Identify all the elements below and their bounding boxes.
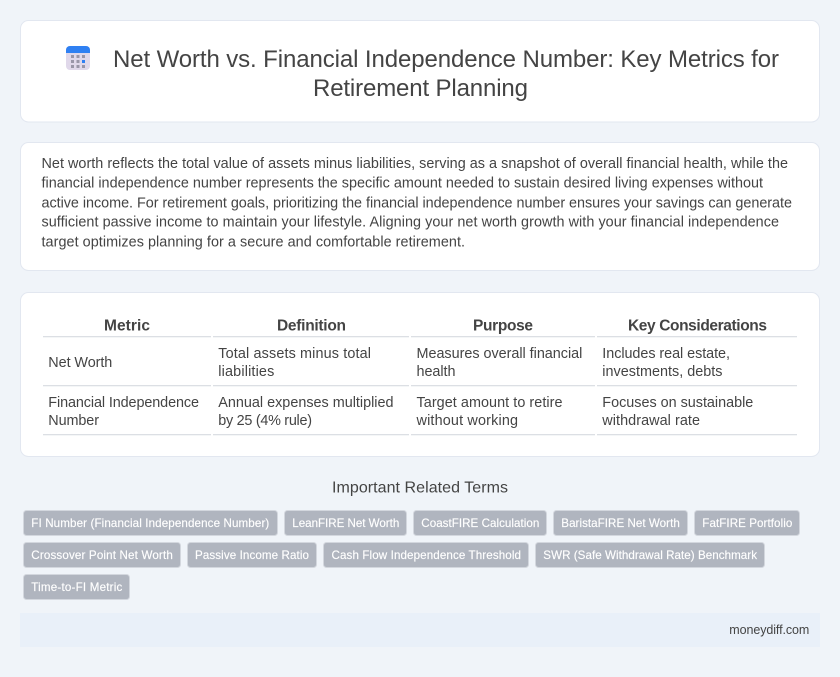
summary paragraph: Net worth reflects the total value of assets minus liabilities, serving as a snapshot of overall financial health, while the: [42, 156, 788, 172]
panel: summary text: [20, 142, 820, 270]
tag: [24, 574, 130, 600]
table row: net worth: Net Worth: [48, 355, 112, 371]
table row: financial independence number: Focuses on sustainable: [602, 395, 753, 411]
table header: [104, 318, 767, 334]
tag: FatFIRE Portfolio: [702, 517, 792, 530]
title: [113, 46, 779, 102]
panel: comparison table: [20, 292, 820, 456]
summary paragraph: [42, 156, 792, 250]
tag: SWR (Safe Withdrawal Rate) Benchmark: [543, 549, 757, 562]
tag: Passive Income Ratio: [195, 549, 309, 562]
tag: [324, 542, 528, 568]
tag: Cash Flow Independence Threshold: [332, 549, 521, 562]
footer: [20, 613, 820, 647]
table row: financial independence number: Annual expenses multiplied: [218, 395, 394, 411]
summary paragraph: sufficient passive income to maintain your lifestyle. Aligning your net worth growth with your financial independence: [42, 214, 779, 230]
table row: financial independence number: withdrawal rate: [601, 413, 700, 429]
tag: [414, 510, 546, 536]
summary paragraph: active income. For retirement goals, prioritizing the financial independence number ensures your savings can generate: [42, 196, 792, 212]
tag: LeanFIRE Net Worth: [292, 517, 399, 530]
tag: CoastFIRE Calculation: [421, 517, 539, 530]
tag: [284, 510, 406, 536]
table header: Key Considerations: [628, 318, 767, 334]
tag: [554, 510, 688, 536]
table row: financial independence number: Target amount to retire: [416, 395, 562, 411]
table row: financial independence number: by 25 (4% rule): [218, 413, 312, 429]
table row: net worth: liabilities: [218, 364, 274, 380]
tag: BaristaFIRE Net Worth: [561, 517, 680, 530]
related term tags: [24, 510, 800, 600]
table row: net worth: [48, 346, 730, 380]
icon: calendar: [66, 46, 90, 70]
table row: net worth: Total assets minus total: [218, 346, 371, 362]
summary paragraph: financial independence number represents the specific amount needed to sustain desired living expenses without: [42, 176, 763, 192]
title: Net Worth vs. Financial Independence Number: Key Metrics for: [113, 46, 779, 73]
tag: [24, 542, 180, 568]
table row: net worth: health: [416, 364, 456, 380]
summary paragraph: target optimizes planning for a secure and comfortable retirement.: [42, 234, 465, 250]
table header: Definition: [277, 318, 346, 334]
heading: related terms: Important Related Terms: [332, 480, 508, 496]
tag: Crossover Point Net Worth: [31, 549, 173, 562]
table row: net worth: investments, debts: [602, 364, 722, 380]
table row: financial independence number: Financial Independence: [48, 395, 199, 411]
tag: FI Number (Financial Independence Number): [31, 517, 269, 530]
tag: [694, 510, 800, 536]
table row: financial independence number: [48, 395, 753, 429]
table row: net worth: Measures overall financial: [416, 346, 582, 362]
table row: financial independence number: Number: [48, 413, 99, 429]
title: Retirement Planning: [313, 75, 528, 102]
tag: [536, 542, 764, 568]
tag: [24, 510, 278, 536]
tag: Time-to-FI Metric: [31, 581, 123, 594]
panel: header: [20, 20, 820, 122]
table header: Purpose: [473, 318, 533, 334]
table row: financial independence number: without working: [416, 413, 518, 429]
table row: net worth: Includes real estate,: [602, 346, 730, 362]
footer: moneydiff.com: [729, 623, 809, 637]
tag: [188, 542, 316, 568]
table header: Metric: [104, 318, 150, 334]
